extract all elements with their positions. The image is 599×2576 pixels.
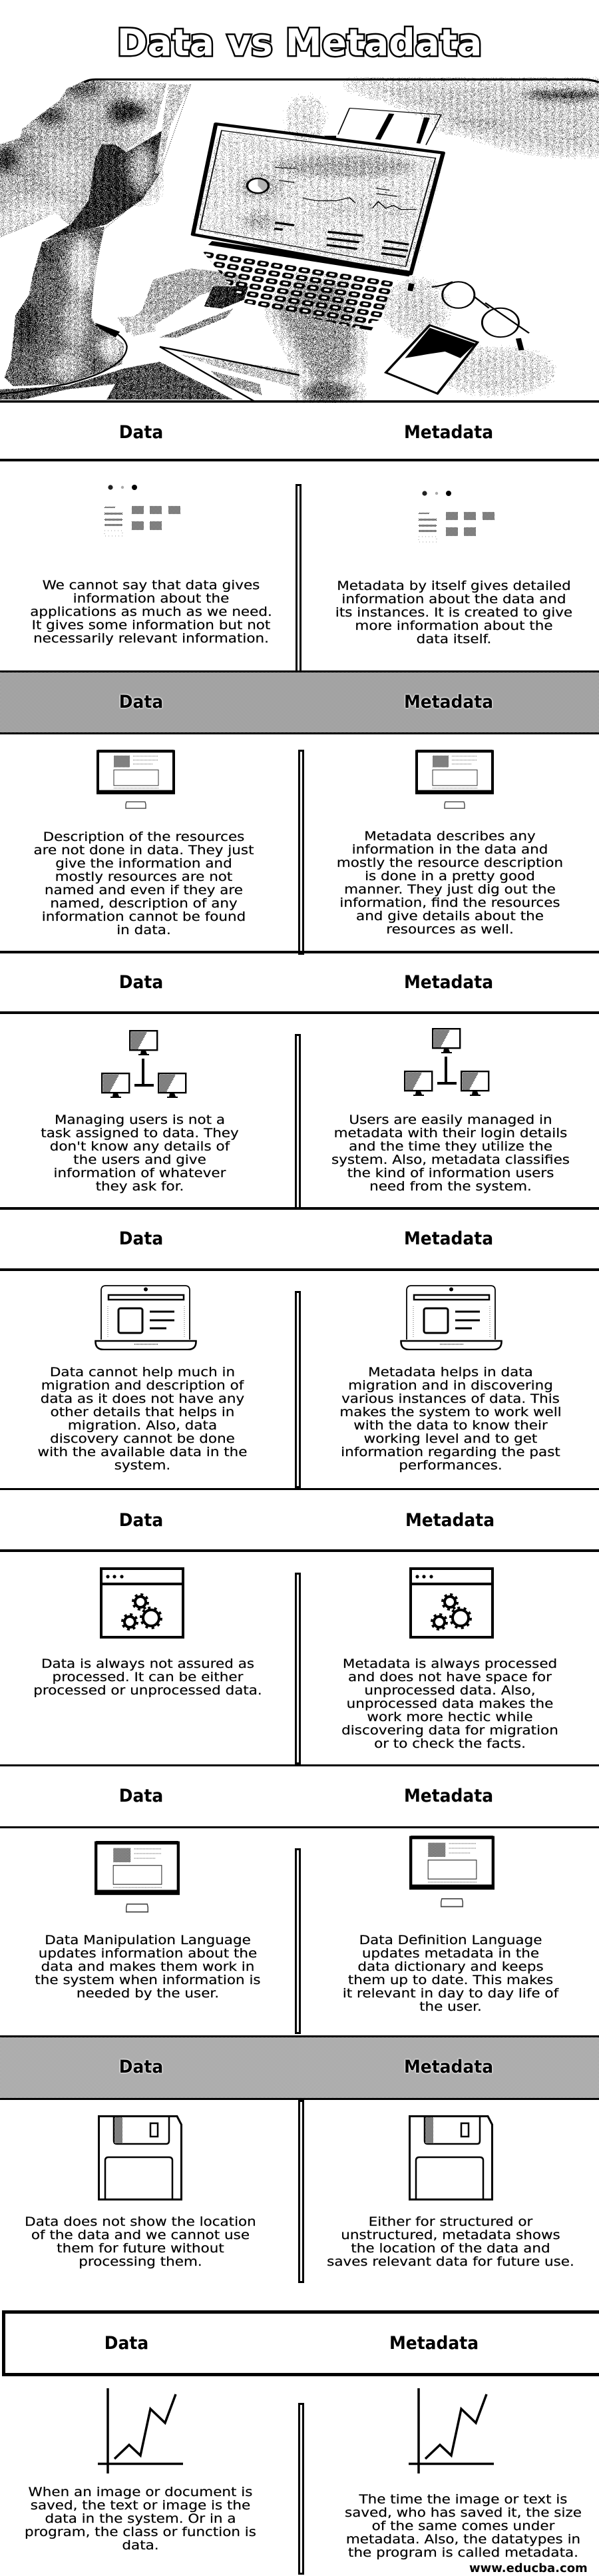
icon: metadata gears window xyxy=(409,1567,494,1639)
right side shading xyxy=(202,85,599,403)
heading: metadata: Metadata xyxy=(404,1786,493,1806)
left side shading xyxy=(0,76,300,399)
text: metadata: makes the system to work well xyxy=(339,1405,562,1419)
text: data: program, the class or function is xyxy=(25,2525,256,2539)
icon: metadata network xyxy=(404,1028,490,1096)
text: metadata: with the data to know their xyxy=(353,1418,548,1433)
text: metadata: updates metadata in the xyxy=(362,1945,539,1960)
text: data: Description of the resources xyxy=(43,830,244,844)
text: data: of the data and we cannot use xyxy=(31,2228,250,2242)
text: data: Data is always not assured as xyxy=(41,1657,254,1671)
panel: comparison 3 xyxy=(0,951,599,1207)
heading: metadata: Metadata xyxy=(404,2057,493,2077)
heading: data: Data xyxy=(104,2333,148,2354)
text: data: migration and description of xyxy=(41,1378,244,1393)
text: data: saved, the text or image is the xyxy=(31,2498,250,2513)
text: data: other details that helps in xyxy=(51,1405,234,1419)
text: data: When an image or document is xyxy=(29,2485,252,2499)
heading: metadata: Metadata xyxy=(404,1228,493,1249)
icon: data line chart xyxy=(98,2388,183,2473)
text: metadata: Metadata is always processed xyxy=(343,1657,557,1671)
text: data xyxy=(25,2485,256,2553)
title: Data vs Metadata xyxy=(117,21,482,64)
heading: data: Data xyxy=(119,1786,163,1806)
text: metadata: and the time they utilize the xyxy=(349,1139,552,1153)
text: metadata: the kind of information users xyxy=(347,1165,554,1180)
icon: metadata laptop xyxy=(400,1285,502,1350)
text: data: migration. Also, data xyxy=(68,1418,217,1433)
text: data: processed. It can be either xyxy=(53,1670,243,1684)
text: metadata: unstructured, metadata shows xyxy=(341,2228,560,2242)
icon: data laptop xyxy=(95,1285,197,1350)
text: metadata: is done in a pretty good xyxy=(365,868,535,883)
text: metadata: of the same comes under xyxy=(372,2518,554,2533)
heading: metadata: Metadata xyxy=(404,692,493,712)
heading: metadata: Metadata xyxy=(405,1510,495,1530)
heading: metadata: Metadata xyxy=(404,972,493,993)
text: data xyxy=(38,1365,247,1473)
text: data: the users and give xyxy=(73,1152,206,1166)
text: data: don't know any details of xyxy=(50,1139,230,1153)
text: metadata: information about the data and xyxy=(341,592,566,607)
header band xyxy=(0,2035,599,2100)
text: metadata: mostly the resource description xyxy=(337,855,563,870)
text: data: Data does not show the location xyxy=(25,2214,256,2229)
text: metadata: saved, who has saved it, the size xyxy=(345,2505,582,2519)
heading: data: Data xyxy=(119,422,163,443)
text: metadata: metadata with their login details xyxy=(334,1125,567,1140)
panel: comparison 2 xyxy=(0,670,599,955)
text: metadata xyxy=(341,1657,558,1751)
text: metadata: more information about the xyxy=(355,619,553,633)
header box xyxy=(2,2310,599,2376)
text: data: discovery cannot be done xyxy=(50,1431,235,1446)
text: data: necessarily relevant information. xyxy=(33,631,268,646)
text: metadata: the program is called metadata. xyxy=(348,2545,578,2559)
panel: comparison 5 xyxy=(0,1488,599,1764)
text: data xyxy=(35,1932,261,2000)
text: data: in data. xyxy=(116,923,171,937)
icon: metadata floppy disk xyxy=(409,2115,493,2200)
text: data: information of whatever xyxy=(54,1165,226,1180)
text: metadata: need from the system. xyxy=(369,1178,532,1193)
text: metadata: resources as well. xyxy=(386,921,514,936)
heading: metadata: Metadata xyxy=(404,422,493,443)
text: data: processed or unprocessed data. xyxy=(33,1683,262,1698)
text: data xyxy=(25,2214,256,2269)
text: metadata: working level and to get xyxy=(364,1431,537,1446)
text: metadata: saves relevant data for future use. xyxy=(327,2254,574,2269)
panel: comparison 6 xyxy=(0,1764,599,2034)
icon: data floppy disk xyxy=(98,2115,182,2200)
text: data: task assigned to data. They xyxy=(41,1125,239,1140)
icon: data grid xyxy=(104,485,180,537)
text: data: system. xyxy=(114,1458,170,1473)
text: metadata: Metadata helps in data xyxy=(368,1365,533,1380)
heading: data: Data xyxy=(119,1510,163,1530)
icon: data monitor xyxy=(95,1841,180,1912)
text: data: data in the system. Or in a xyxy=(45,2511,236,2526)
text: metadata: its instances. It is created to give xyxy=(335,605,572,620)
text: data: We cannot say that data gives xyxy=(42,578,260,593)
text: data: Data cannot help much in xyxy=(50,1365,235,1380)
text: data: named, description of any xyxy=(50,896,238,911)
text: data: data and makes them work in xyxy=(41,1959,254,1973)
text: metadata: unprocessed data. Also, xyxy=(364,1683,536,1698)
text: data: information about the xyxy=(73,591,229,606)
text: data: the system when information is xyxy=(35,1972,261,1987)
text: metadata: the location of the data and xyxy=(351,2241,550,2256)
text: metadata: it relevant in day to day life of xyxy=(343,1985,558,2000)
text: data: data. xyxy=(122,2538,159,2553)
text: data: updates information about the xyxy=(39,1945,257,1960)
text: metadata: work more hectic while xyxy=(367,1710,533,1724)
text: metadata xyxy=(345,2491,582,2559)
text: metadata: data dictionary and keeps xyxy=(357,1959,544,1973)
heading: metadata: Metadata xyxy=(389,2333,479,2354)
panel: comparison 8 xyxy=(2,2310,599,2575)
icon: data network xyxy=(101,1030,186,1098)
text: metadata: the user. xyxy=(419,1999,482,2013)
text: metadata: Metadata by itself gives detailed xyxy=(337,579,571,593)
text: data xyxy=(33,1657,262,1698)
text: metadata: or to check the facts. xyxy=(374,1736,526,1751)
text: metadata: them up to date. This makes xyxy=(348,1972,553,1987)
text: metadata: Metadata describes any xyxy=(364,828,536,843)
icon: metadata grid xyxy=(418,491,495,542)
text: metadata: The time the image or text is xyxy=(359,2491,567,2506)
text: metadata: Users are easily managed in xyxy=(349,1112,552,1127)
text: data: named and even if they are xyxy=(45,883,243,898)
text: metadata: information, find the resources xyxy=(339,895,560,909)
icon: metadata line chart xyxy=(409,2388,494,2473)
icon: metadata monitor xyxy=(409,1836,495,1907)
heading: data: Data xyxy=(119,972,163,993)
heading: data: Data xyxy=(119,692,163,712)
text: data: mostly resources are not xyxy=(55,870,232,884)
text: metadata xyxy=(343,1932,559,2013)
text: data xyxy=(30,578,272,646)
text: data: data as it does not have any xyxy=(41,1392,244,1406)
footer url: www.educba.com xyxy=(469,2561,588,2575)
icon: metadata monitor xyxy=(415,750,494,809)
text: metadata: metadata. Also, the datatypes in xyxy=(346,2531,580,2546)
text: data: processing them. xyxy=(79,2254,202,2269)
text: data xyxy=(34,830,254,937)
panel: comparison 7 xyxy=(0,2035,599,2283)
text: metadata xyxy=(339,1365,562,1473)
header band xyxy=(0,670,599,734)
text: metadata: Data Definition Language xyxy=(359,1932,542,1947)
text: data: give the information and xyxy=(55,856,232,871)
text: metadata xyxy=(331,1112,570,1193)
text: metadata: performances. xyxy=(399,1458,502,1473)
text: metadata: migration and in discovering xyxy=(348,1378,553,1393)
text: data: Managing users is not a xyxy=(55,1112,225,1127)
text: metadata: system. Also, metadata classifies xyxy=(331,1152,570,1166)
heading: data: Data xyxy=(119,1228,163,1249)
panel: comparison 1 xyxy=(0,422,599,670)
text: metadata: various instances of data. This xyxy=(341,1392,560,1406)
text: metadata xyxy=(335,579,572,646)
icon: data gears window xyxy=(100,1567,184,1639)
text: metadata: information regarding the past xyxy=(341,1445,560,1459)
text: data: them for future without xyxy=(57,2241,224,2256)
text: data xyxy=(41,1112,239,1193)
text: metadata: data itself. xyxy=(417,632,491,646)
text: metadata: discovering data for migration xyxy=(341,1723,558,1738)
text: data: are not done in data. They just xyxy=(34,843,254,858)
hero line work xyxy=(0,79,599,401)
text: data: Data Manipulation Language xyxy=(45,1932,251,1947)
text: metadata xyxy=(337,828,563,936)
text: data: needed by the user. xyxy=(77,1985,219,2000)
text: metadata xyxy=(327,2214,574,2269)
text: metadata: manner. They just dig out the xyxy=(344,882,556,896)
text: data: applications as much as we need. xyxy=(30,605,272,619)
text: metadata: and does not have space for xyxy=(348,1670,552,1684)
text: metadata: unprocessed data makes the xyxy=(347,1696,553,1711)
text: data: they ask for. xyxy=(96,1178,184,1193)
text: metadata: and give details about the xyxy=(356,908,544,923)
heading: data: Data xyxy=(119,2057,163,2077)
hero image: hands typing on a laptop xyxy=(0,77,599,403)
text: data: with the available data in the xyxy=(38,1445,247,1459)
panel: comparison 4 xyxy=(0,1207,599,1488)
text: data: It gives some information but not xyxy=(31,618,270,633)
text: data: information cannot be found xyxy=(42,909,246,924)
icon: data monitor xyxy=(97,750,175,809)
text: metadata: information in the data and xyxy=(352,842,548,856)
text: metadata: Either for structured or xyxy=(369,2214,532,2229)
